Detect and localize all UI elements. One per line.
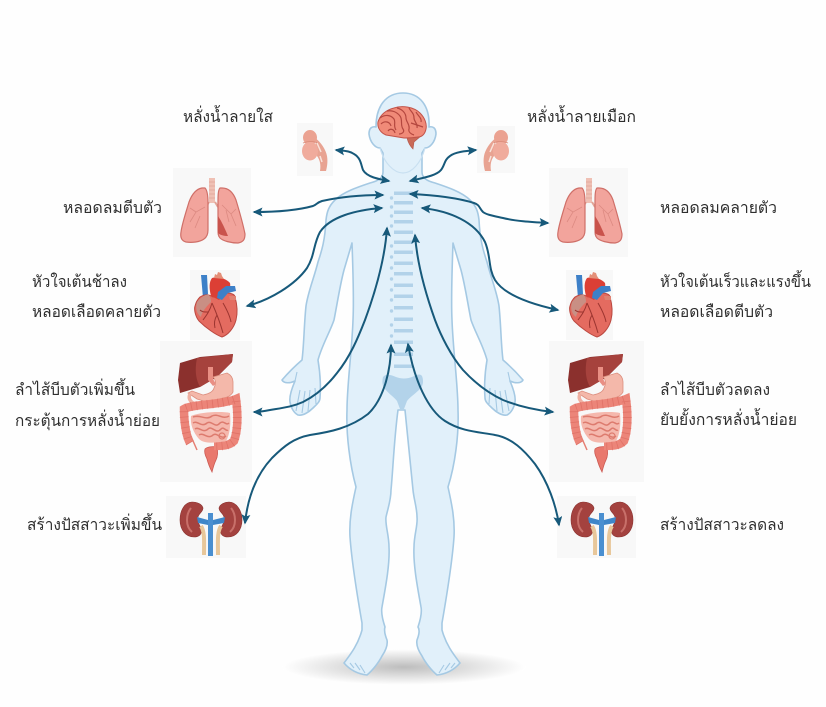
human body figure: [282, 93, 523, 675]
icon: left digestive organs: [178, 354, 237, 472]
ground shadow: [282, 649, 526, 685]
nerve arrows: [245, 150, 559, 525]
label: clear saliva: หลั่งน้ำลายใส: [183, 105, 273, 126]
arrow: left kidneys: [245, 345, 391, 523]
label: intestine contracts less: ลำไส้บีบตัวลดลง: [660, 380, 770, 399]
arrow: right heart: [422, 208, 558, 310]
icon: brain: [378, 107, 426, 149]
icon: left heart: [195, 272, 237, 337]
arrow: right kidneys: [408, 344, 559, 525]
icon: right lungs: [558, 178, 622, 243]
label: mucous saliva: หลั่งน้ำลายเมือก: [527, 105, 636, 126]
arrow: right lungs: [410, 194, 548, 223]
label: vessels constrict: หลอดเลือดตีบตัว: [660, 303, 773, 321]
labels: right column: [527, 105, 811, 534]
label: stimulate digestive juices: กระตุ้นการหลั่งน้ำย่อย: [15, 409, 160, 431]
label: heart faster: หัวใจเต้นเร็วและแรงขึ้น: [660, 270, 811, 291]
labels: left column: [15, 105, 273, 534]
jaw line: [380, 148, 425, 173]
label: intestine contracts more: ลำไส้บีบตัวเพิ่มขึ้น: [15, 378, 135, 399]
panel: organ backgrounds: [160, 123, 644, 558]
body silhouette: [282, 93, 523, 675]
pelvis: [382, 374, 423, 409]
label: bronchi dilate: หลอดลมคลายตัว: [660, 200, 777, 217]
label: bronchi constrict: หลอดลมตีบตัว: [63, 199, 162, 217]
label: more urine: สร้างปัสสาวะเพิ่มขึ้น: [27, 513, 162, 534]
icon: left lungs: [181, 178, 245, 243]
arrow: left lungs: [254, 195, 383, 212]
icon: right digestive organs: [568, 354, 627, 472]
icon: right salivary gland: [484, 130, 509, 171]
finger and toe details: [295, 372, 510, 673]
spine vertebrae: [390, 192, 413, 368]
label: less urine: สร้างปัสสาวะลดลง: [660, 516, 784, 534]
icon: left kidneys: [180, 502, 242, 556]
icon: right heart: [570, 272, 612, 337]
icon: left salivary gland: [302, 130, 327, 171]
arrow: right digestive: [415, 235, 553, 412]
label: heart slows: หัวใจเต้นช้าลง: [32, 272, 127, 291]
arrow: left heart: [247, 208, 382, 306]
icon: right kidneys: [571, 502, 633, 556]
label: vessels dilate: หลอดเลือดคลายตัว: [32, 303, 161, 321]
arrow: left salivary: [336, 150, 389, 181]
arrow: left digestive: [254, 228, 387, 412]
label: inhibit digestive juices: ยับยั้งการหลั่งน้ำย่อย: [660, 408, 797, 429]
arrow: right salivary: [410, 150, 476, 181]
